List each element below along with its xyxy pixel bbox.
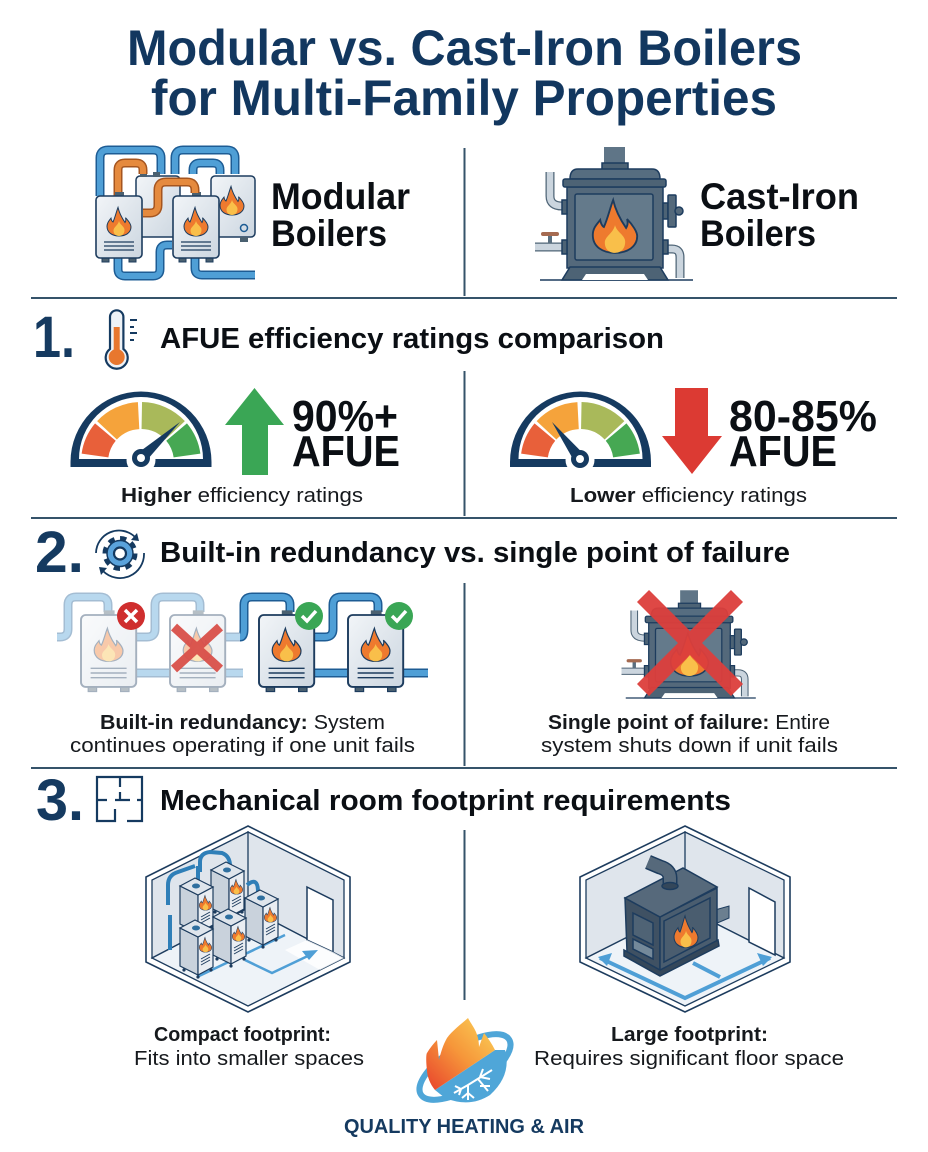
label: cast-iron boilers: Boilers	[700, 213, 816, 254]
arrow: up	[225, 388, 284, 475]
section 1 number: 1.	[33, 305, 75, 370]
arrow: down	[662, 388, 722, 474]
title	[127, 20, 802, 126]
icon: modular boilers	[96, 150, 255, 276]
caption: built-in redundancy	[70, 712, 415, 757]
value: 90%+ AFUE	[292, 392, 400, 476]
caption: built-in redundancy: continues operating if one unit fails	[70, 735, 415, 757]
large stove	[624, 862, 719, 976]
failed boilers	[57, 597, 243, 692]
diagram: failed cast-iron boiler	[622, 590, 756, 698]
illustration: large room	[580, 826, 790, 1012]
badge: ok 2	[385, 602, 413, 630]
caption: compact footprint: Compact footprint:	[154, 1024, 331, 1046]
front centre unit	[173, 192, 219, 262]
label: cast-iron boilers	[700, 176, 859, 254]
value: 90%+ AFUE: AFUE	[292, 427, 400, 476]
modular units	[180, 862, 278, 979]
caption: built-in redundancy: Built-in redundancy: System	[100, 712, 385, 734]
caption: compact footprint	[134, 1024, 364, 1070]
logo: Quality Heating & Air	[344, 1018, 585, 1138]
caption: large footprint: Requires significant floor space	[534, 1048, 844, 1070]
value: 80-85% AFUE	[729, 392, 877, 476]
title: for Multi-Family Properties	[151, 70, 777, 126]
icon: gear with arrows	[96, 531, 144, 578]
label: modular boilers	[271, 176, 410, 254]
big red cross	[174, 627, 220, 669]
back right unit	[211, 176, 255, 242]
label: cast-iron boilers: Cast-Iron	[700, 176, 859, 217]
caption: single point of failure: Single point of failure: Entire	[548, 712, 830, 734]
heading: section 1: AFUE efficiency ratings comparison	[160, 323, 664, 355]
heading: section 3: Mechanical room footprint requirements	[160, 785, 731, 817]
working boilers	[240, 597, 428, 692]
illustration: compact room	[146, 826, 350, 1012]
caption: compact footprint: Fits into smaller spaces	[134, 1048, 364, 1070]
badge: ok 1	[295, 602, 323, 630]
value: 80-85% AFUE: 80-85%	[729, 392, 877, 441]
value: 90%+ AFUE: 90%+	[292, 392, 398, 441]
logo text: QUALITY HEATING & AIR	[344, 1116, 585, 1138]
caption: single point of failure	[541, 712, 838, 757]
caption: lower efficiency: Lower efficiency ratings	[570, 485, 807, 507]
diagram: redundant boilers	[57, 597, 428, 692]
section 3 number: 3.	[36, 768, 84, 833]
caption: higher efficiency: Higher efficiency ratings	[121, 485, 363, 507]
label: modular boilers: Modular	[271, 176, 410, 217]
heading: section 2: Built-in redundancy vs. single point of failure	[160, 537, 790, 569]
label: modular boilers: Boilers	[271, 213, 387, 254]
caption: large footprint: Large footprint:	[611, 1024, 768, 1046]
section 2 number: 2.	[35, 520, 84, 585]
caption: single point of failure: system shuts down if unit fails	[541, 735, 838, 757]
icon: cast-iron boiler	[535, 147, 693, 280]
title: Modular vs. Cast-Iron Boilers	[127, 20, 802, 76]
logo mark	[410, 1018, 520, 1112]
gauge: higher efficiency	[70, 391, 212, 474]
badge: failed	[117, 602, 145, 630]
icon: floor plan	[97, 777, 142, 821]
icon: thermometer	[106, 310, 137, 369]
value: 80-85% AFUE: AFUE	[729, 427, 837, 476]
front left unit	[96, 192, 142, 262]
caption: large footprint	[534, 1024, 844, 1070]
gauge: lower efficiency	[510, 391, 651, 474]
